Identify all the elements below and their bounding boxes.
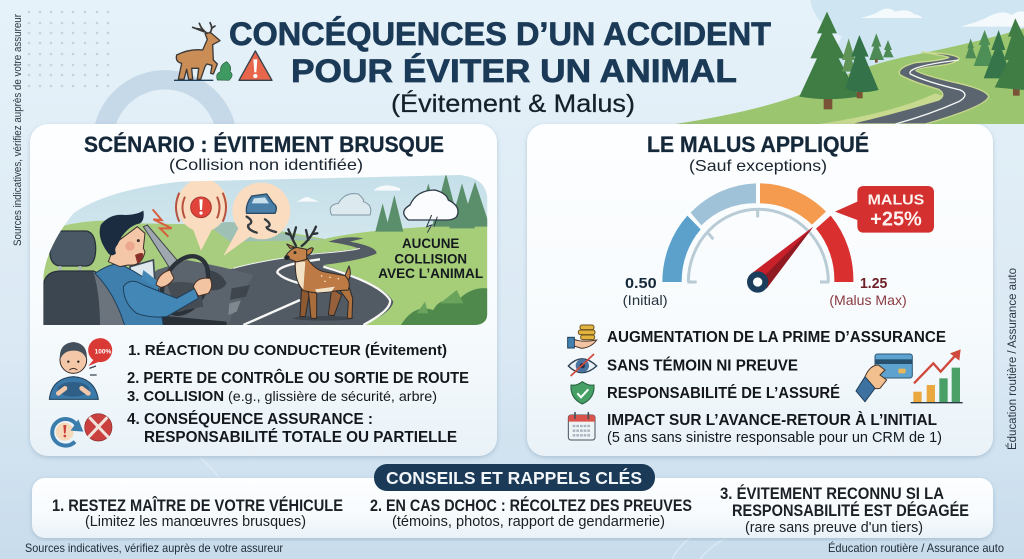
effects list: RESPONSABILITÉ DE L’ASSURÉ: [607, 385, 840, 402]
title: POUR ÉVITER UN ANIMAL: [291, 52, 737, 89]
seat: [50, 231, 96, 266]
tip 3: [720, 484, 969, 536]
icon: shield check: [571, 382, 594, 404]
gauge label min: [623, 276, 668, 308]
icon: stressed driver: 100%: [95, 349, 112, 356]
steps list: [127, 342, 469, 446]
scenario subheading: (Collision non identifiée): [169, 157, 363, 174]
icon: warning triangle: [239, 51, 272, 80]
callout: aucune collision: AUCUNE: [402, 236, 459, 251]
wheel: [160, 254, 210, 316]
bubble car: [223, 183, 290, 256]
trees: [375, 173, 490, 232]
icon: eye crossed: [568, 354, 597, 376]
vertical source right: Éducation routière / Assurance auto: [1006, 268, 1019, 450]
effects list: AUGMENTATION DE LA PRIME D’ASSURANCE: [607, 329, 946, 346]
effects list: IMPACT SUR L’AVANCE-RETOUR À L’INITIAL: [607, 412, 937, 429]
callout: malus +25%: MALUS: [868, 192, 924, 209]
clouds: [860, 9, 1024, 27]
callout: malus +25%: [835, 186, 934, 233]
icon: deer: [174, 23, 220, 80]
icon: crossed tools: [85, 414, 112, 441]
tip 3: 3. ÉVITEMENT RECONNU SI LA: [720, 484, 944, 503]
storm cloud: [404, 190, 458, 220]
windscreen pillar: [143, 225, 178, 268]
callout: aucune collision: COLLISION: [394, 251, 467, 266]
gauge label max: 1.25: [860, 276, 887, 292]
tip 2: (témoins, photos, rapport de gendarmerie): [392, 514, 665, 530]
icon: calendar: [568, 413, 595, 440]
outlined cloud: [330, 194, 371, 215]
gauge label max: [829, 276, 907, 308]
dot pattern: [28, 11, 109, 87]
tip 1: 1. RESTEZ MAÎTRE DE VOTRE VÉHICULE: [52, 496, 343, 515]
subtitle: (Évitement & Malus): [391, 89, 635, 118]
hair: [100, 211, 144, 255]
icon: rotate warning: [52, 419, 83, 446]
road: [849, 52, 989, 124]
landscape top right: [675, 0, 1024, 124]
tip 2: [370, 496, 692, 530]
gauge label min: (Initial): [623, 292, 668, 308]
scenario heading: SCÉNARIO : ÉVITEMENT BRUSQUE: [84, 132, 444, 157]
malus subheading: (Sauf exceptions): [689, 158, 827, 175]
tip 2: 2. EN CAS DCHOC : RÉCOLTEZ DES PREUVES: [370, 496, 692, 515]
icon: hand with card: [856, 354, 912, 402]
tip 3: (rare sans preuve d'un tiers): [745, 520, 923, 536]
illustration: driver and deer scene: [40, 173, 490, 327]
trees: [799, 12, 1024, 109]
effects list: SANS TÉMOIN NI PREUVE: [607, 358, 798, 374]
effects list: [607, 329, 946, 446]
tip 1: [52, 496, 343, 530]
icon: plants: [217, 62, 232, 80]
head: [108, 227, 145, 267]
footer source: Sources indicatives, vérifiez auprès de votre assureur: [25, 541, 283, 555]
icons: effects: [568, 325, 963, 440]
conseils pill heading: CONSEILS ET RAPPELS CLÉS: [386, 467, 642, 488]
steps list: 3. COLLISION: [127, 388, 224, 405]
title: [229, 15, 771, 89]
callout: malus +25%: +25%: [870, 209, 922, 231]
deer: [285, 244, 353, 321]
dashboard: [155, 260, 253, 325]
panel: malus: [527, 124, 993, 456]
icon: hand with coins: [568, 325, 597, 348]
title icons: [174, 23, 272, 80]
gauge label max: (Malus Max): [829, 292, 907, 308]
bubble alert: [177, 178, 228, 251]
effects list: (5 ans sans sinistre responsable pour un CRM de 1): [607, 430, 942, 446]
needle: [752, 227, 813, 288]
panel: scenario: [30, 124, 497, 456]
conseils pill heading: [374, 464, 655, 491]
steps list: 2. PERTE DE CONTRÔLE OU SORTIE DE ROUTE: [127, 368, 469, 387]
decorative ring: [95, 70, 235, 124]
hands: [156, 270, 174, 287]
bush: [400, 288, 487, 327]
road: [217, 237, 393, 327]
icons: stressed driver and insurance: [49, 338, 112, 446]
hill: [675, 28, 1024, 124]
sky: [779, 0, 1024, 124]
title: CONCÉQUENCES D’UN ACCIDENT: [229, 15, 771, 52]
steps list: (e.g., glissière de sécurité, arbre): [228, 388, 437, 404]
gauge chart: [623, 183, 934, 308]
tip 3: RESPONSABILITÉ EST DÉGAGÉE: [732, 501, 969, 520]
callout: aucune collision: [378, 236, 483, 281]
gauge label min: 0.50: [625, 276, 657, 292]
steps list: 4. CONSÉQUENCE ASSURANCE :: [127, 409, 373, 428]
swoosh decoration bottom: [200, 458, 745, 559]
steps list: RESPONSABILITÉ TOTALE OU PARTIELLE: [144, 427, 457, 446]
icon: rising chart: [911, 349, 963, 403]
panel: conseils: [32, 464, 993, 538]
arm: [123, 281, 198, 317]
malus heading: LE MALUS APPLIQUÉ: [647, 132, 869, 157]
man body: [95, 263, 163, 327]
footer theme: Éducation routière / Assurance auto: [828, 540, 1004, 555]
callout: aucune collision: AVEC L’ANIMAL: [378, 266, 483, 281]
alert spark: [153, 209, 172, 237]
steps list: 1. RÉACTION DU CONDUCTEUR (Évitement): [128, 342, 447, 359]
tip 1: (Limitez les manœuvres brusques): [85, 514, 306, 530]
